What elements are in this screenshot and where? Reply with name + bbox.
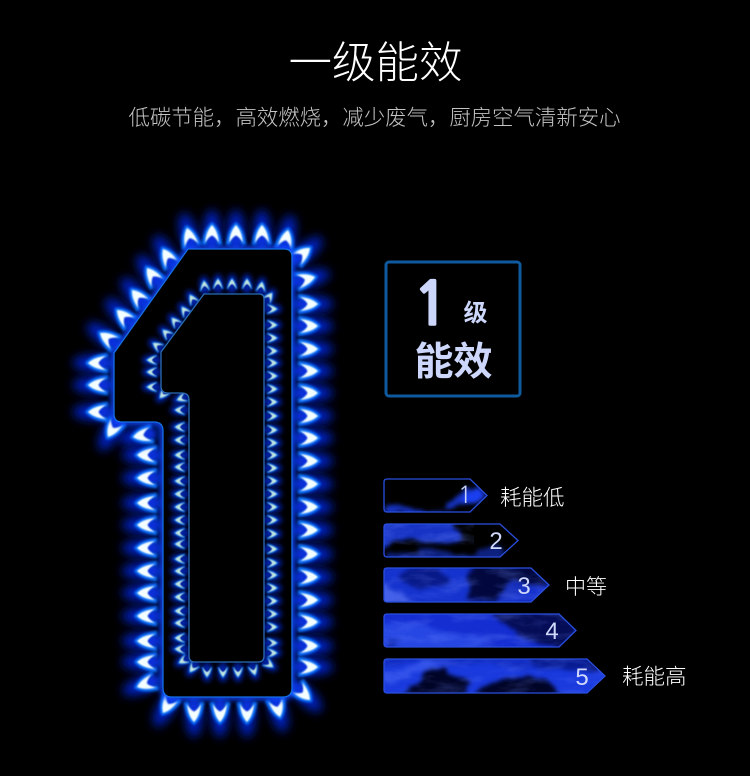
badge: level 1 energy efficiency: 级 [464, 300, 488, 327]
level bar 2: 2 [489, 528, 503, 555]
level bar 2 [383, 523, 519, 558]
outer flames [73, 210, 333, 737]
level bar 3: 3 [517, 573, 531, 600]
level bar 3 [383, 567, 550, 603]
level bar 4 [383, 613, 577, 648]
subtitle: 低碳节能，高效燃烧，减少废气，厨房空气清新安心 [128, 106, 620, 130]
level bar 1 [384, 479, 487, 514]
level bar 1: 1 [458, 484, 472, 507]
label: high consumption: 耗能高 [622, 665, 687, 689]
badge: level 1 energy efficiency: 能效 [414, 341, 493, 384]
label: medium: 中等 [565, 576, 607, 599]
level bar 5 [383, 658, 606, 694]
level bar 5: 5 [575, 664, 589, 691]
label: low consumption: 耗能低 [500, 486, 565, 510]
inner outline of numeral [161, 294, 264, 662]
badge: level 1 energy efficiency: 1 [413, 275, 449, 334]
badge: level 1 energy efficiency [386, 262, 520, 396]
level bar 4: 4 [545, 618, 559, 645]
icon: flame number 1 [73, 210, 333, 737]
outer outline of numeral [114, 249, 292, 697]
title: 一级能效 [288, 40, 462, 88]
inner flames [142, 274, 282, 682]
